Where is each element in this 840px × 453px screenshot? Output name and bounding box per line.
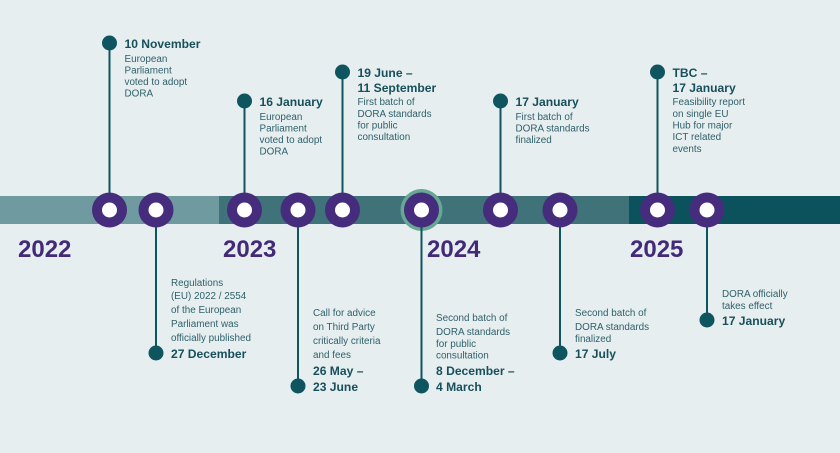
milestone: 16 January: European <box>260 112 302 123</box>
milestone: 19 June – 11 September: First batch of <box>358 97 415 108</box>
milestone: 16 January: Parliament <box>260 124 307 134</box>
milestone: 10 November: European <box>124 54 167 65</box>
milestone: 27 December: 27 December <box>171 347 247 361</box>
milestone: TBC – 17 January: Hub for major <box>672 120 733 132</box>
milestone: DORA takes effect: DORA officially <box>722 289 788 300</box>
milestone: 17 January finalized: 17 January <box>516 95 579 109</box>
year: 2022: 2022 <box>18 236 71 263</box>
milestone: 17 January finalized: DORA standards <box>516 124 590 134</box>
milestone: 8 December – 4 March: consultation <box>436 350 489 362</box>
milestone: TBC – 17 January: TBC – <box>672 66 708 80</box>
milestone: 19 June – 11 September <box>325 64 436 228</box>
milestone: 27 December: Parliament was <box>171 319 239 330</box>
milestone: TBC – 17 January: on single EU <box>672 109 728 120</box>
milestone: 16 January: 16 January <box>260 95 323 109</box>
milestone: DORA takes effect <box>690 192 788 328</box>
milestone: 8 December – 4 March: 4 March <box>436 380 482 394</box>
year: 2023: 2023 <box>223 236 276 263</box>
milestone: 27 December: of the European <box>171 305 241 316</box>
milestone: 17 July <box>542 192 649 361</box>
milestone: 17 July: Second batch of <box>575 308 647 319</box>
milestone: 27 December <box>138 192 251 361</box>
milestone: 19 June – 11 September: DORA standards <box>358 109 432 120</box>
milestone: 26 May – 23 June <box>280 192 381 394</box>
milestone: 17 July: DORA standards <box>575 322 649 333</box>
milestone: 16 January: voted to adopt <box>260 135 322 146</box>
year: 2025: 2025 <box>630 236 683 263</box>
timeline bar <box>0 196 840 224</box>
milestone: 19 June – 11 September: 19 June – <box>358 66 413 80</box>
milestone: 8 December – 4 March: 8 December – <box>436 364 515 378</box>
year: 2024: 2024 <box>427 236 481 263</box>
milestone: 10 November: Parliament <box>124 66 172 76</box>
milestone: 26 May – 23 June: critically criteria <box>313 336 381 347</box>
milestone: TBC – 17 January: events <box>672 144 702 155</box>
milestone: 8 December – 4 March: DORA standards <box>436 327 510 338</box>
milestone: DORA takes effect: 17 January <box>722 314 785 328</box>
milestone: 17 July: finalized <box>575 334 611 345</box>
milestone: TBC – 17 January: 17 January <box>672 81 736 95</box>
milestone: 8 December – 4 March: Second batch of <box>436 313 508 324</box>
milestone: 8 December – 4 March <box>400 189 515 394</box>
milestone: 19 June – 11 September: for public <box>358 120 398 132</box>
milestone: 27 December: (EU) 2022 / 2554 <box>171 291 247 302</box>
milestone: 26 May – 23 June: Call for advice <box>313 308 376 319</box>
milestone: 16 January <box>227 94 323 228</box>
milestone: 27 December: officially published <box>171 333 251 344</box>
milestone: 17 January finalized: First batch of <box>516 112 573 123</box>
milestone: 26 May – 23 June: and fees <box>313 350 351 361</box>
milestone: 26 May – 23 June: 23 June <box>313 380 358 394</box>
milestone: TBC – 17 January: Feasibility report <box>672 97 745 108</box>
milestone: 10 November: 10 November <box>124 37 201 51</box>
milestone: 16 January: DORA <box>260 146 288 158</box>
milestone: 10 November: DORA <box>124 88 153 100</box>
milestone: 27 December: Regulations <box>171 278 223 289</box>
milestone: 10 November: voted to adopt <box>124 77 187 88</box>
milestone: 19 June – 11 September: 11 September <box>358 81 436 95</box>
milestone: 8 December – 4 March: for public <box>436 339 476 350</box>
milestone: 17 January finalized: finalized <box>516 135 552 146</box>
milestone: TBC – 17 January: ICT related <box>672 132 721 143</box>
milestone: 26 May – 23 June: on Third Party <box>313 322 375 333</box>
milestone: 17 July: 17 July <box>575 347 616 361</box>
milestone: TBC – 17 January <box>640 64 745 228</box>
milestone: DORA takes effect: takes effect <box>722 301 773 312</box>
milestone: 10 November <box>92 36 201 228</box>
milestone: 26 May – 23 June: 26 May – <box>313 364 364 378</box>
milestone: 19 June – 11 September: consultation <box>358 132 410 143</box>
milestone: 17 January finalized <box>483 94 590 228</box>
